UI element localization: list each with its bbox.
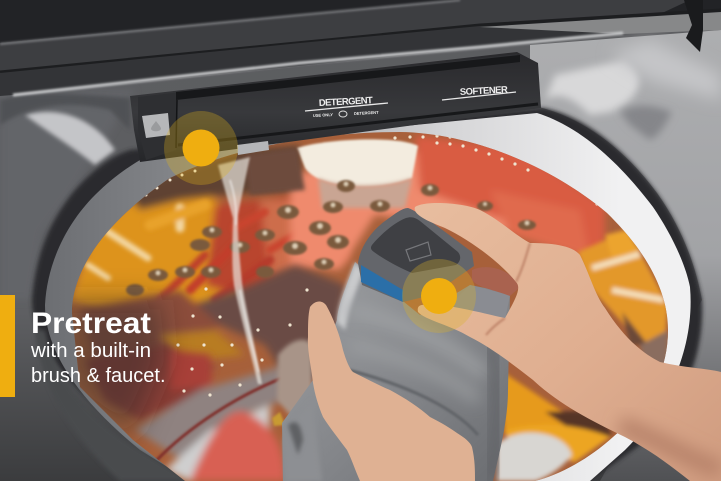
white detergent cup [245,139,418,208]
beige cloth beside hand [277,340,312,415]
lid and top edge [0,0,721,96]
scrub brush [358,208,474,302]
accent bar [0,295,15,397]
tub rim [32,108,702,481]
silver faucet tab [237,141,269,155]
laundry: right orange [497,230,668,481]
softener label: SOFTENER [460,84,508,98]
hotspot: faucet [164,111,238,185]
laundry: salmon top [290,135,605,270]
drum and laundry [50,120,690,481]
caption heading: Pretreat [31,307,151,340]
middle finger [472,267,519,296]
caption line one: with a built-in [30,340,151,362]
icon: dispenser button [142,113,170,138]
laundry: left stripes [88,205,300,300]
laundry: yellow left [70,145,350,320]
yellow scrap [272,412,285,426]
caption [30,307,166,387]
shadow over left of drum [60,300,165,440]
hotspot: brush [402,259,476,333]
caption line two: brush & faucet. [31,365,166,387]
softener label [442,84,516,100]
detergent label [305,95,388,118]
icon: lid hinge [684,0,703,52]
detergent label: DETERGENT [319,95,373,109]
right hand and arm [415,203,721,481]
drum dimples [126,134,599,397]
detergent dispenser [130,52,541,162]
cloth held in hands [282,262,510,481]
laundry: red lower left [85,345,285,481]
left hand [308,301,475,481]
water stream from faucet [218,157,262,384]
detergent label: DETERGENT [354,110,379,116]
laundry: brown center [80,265,345,385]
detergent label: USE ONLY [313,112,333,118]
